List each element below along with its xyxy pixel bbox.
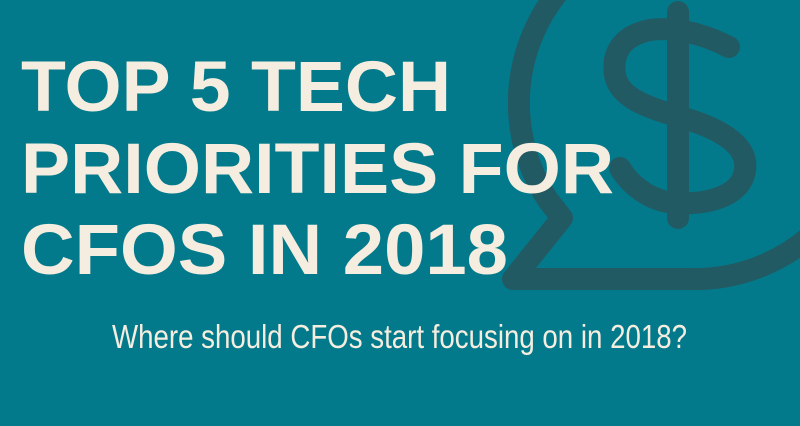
subtitle: Where should CFOs start focusing on in 2018? [112,318,687,355]
title: PRIORITIES FOR [21,130,614,209]
title [21,48,614,290]
title: CFOS IN 2018 [21,211,508,290]
icon: speech bubble with dollar sign [513,0,800,279]
title: TOP 5 TECH [21,48,451,127]
